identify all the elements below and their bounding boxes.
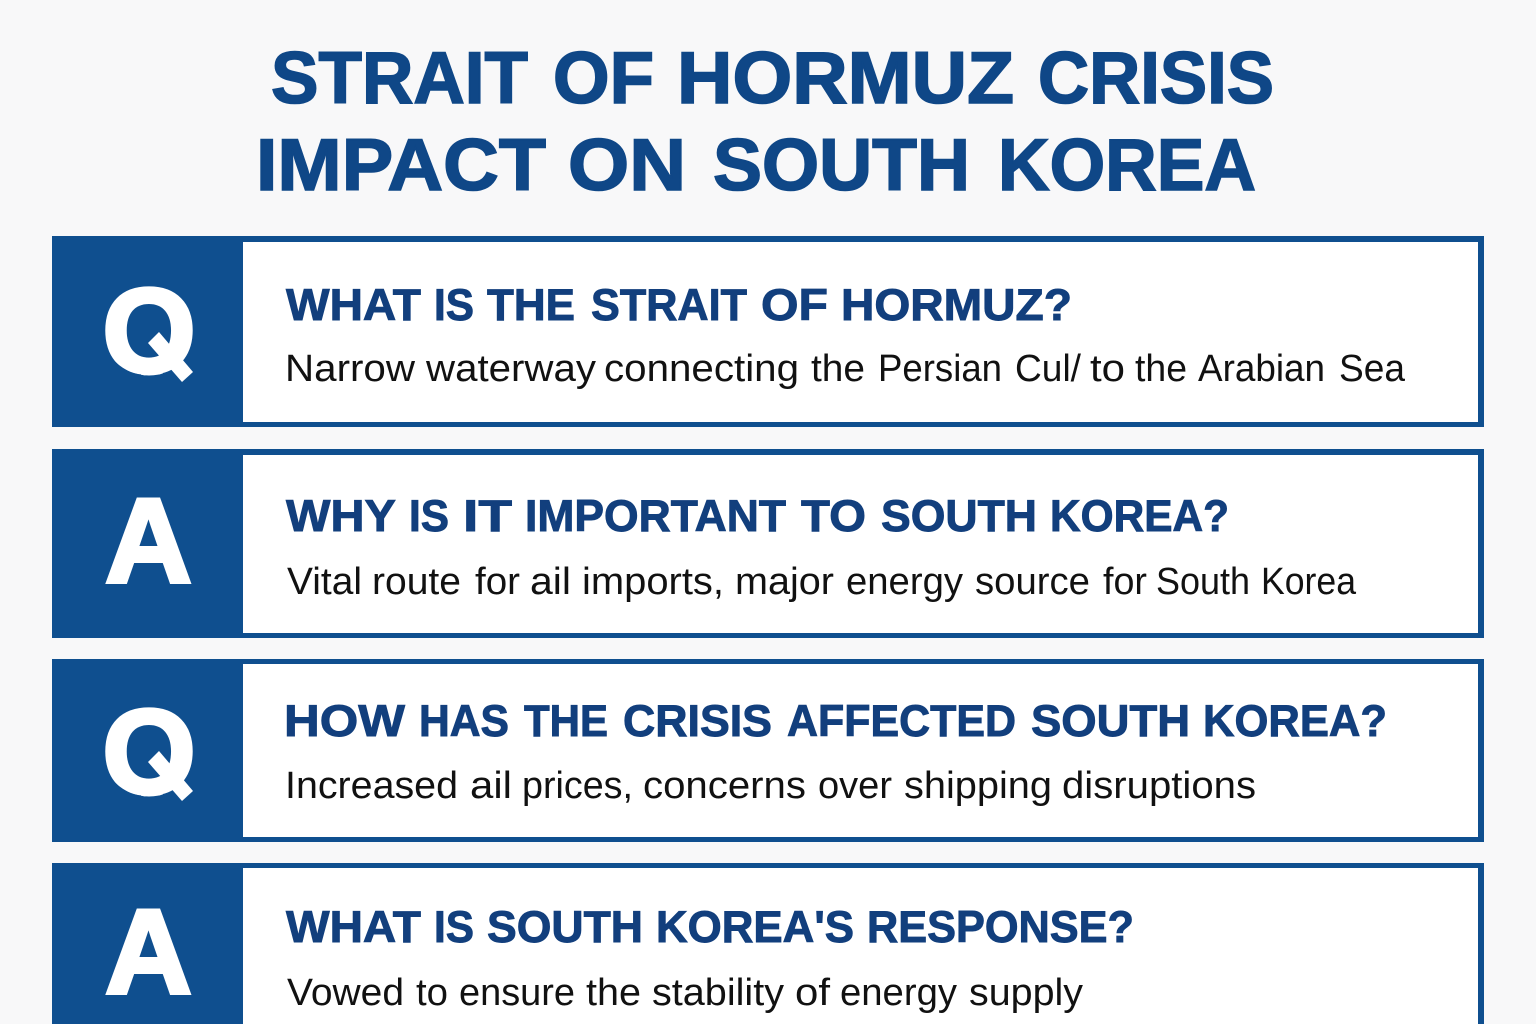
text: energy stability: the (586, 972, 641, 1014)
heading: how affected: AFFECTED (787, 697, 1016, 746)
text: increased prices: over (818, 765, 892, 807)
title: HORMUZ (677, 38, 1014, 119)
text: energy stability: energy (840, 972, 957, 1014)
icon: Q badge (105, 286, 193, 382)
icon: A badge: A (105, 474, 192, 608)
heading: response: KOREA'S (656, 903, 854, 952)
heading: why important: KOREA? (1050, 492, 1229, 541)
title: OF (553, 38, 654, 119)
text: energy stability: of (795, 972, 830, 1014)
panel: answer 1 (52, 449, 1484, 638)
text: energy stability: to (416, 972, 448, 1014)
heading: why important: WHY (286, 492, 395, 541)
text: waterway description: the (811, 348, 865, 390)
heading: why important: IT (463, 492, 512, 541)
text: waterway description: Cul/ (1015, 348, 1081, 390)
heading: how affected: HOW (284, 697, 405, 746)
title: KOREA (998, 125, 1256, 206)
text: waterway description: the (1135, 348, 1187, 390)
icon: Q badge: Q (102, 685, 196, 819)
text: vital route: Vital (287, 561, 362, 603)
text: energy stability: stability (652, 972, 784, 1014)
heading: why important: SOUTH (881, 492, 1037, 541)
heading: response: IS (434, 903, 474, 952)
text: vital route: for (1103, 561, 1147, 603)
panel: question 1 (52, 236, 1484, 427)
heading: what is the strait: OF (761, 281, 828, 330)
text: vital route: energy (846, 561, 963, 603)
text: waterway description: connecting (604, 348, 799, 390)
heading: what is the strait: STRAIT (591, 281, 747, 330)
icon: Q badge (105, 707, 193, 801)
heading: response: RESPONSE? (867, 903, 1134, 952)
heading: how affected: SOUTH (1031, 697, 1190, 746)
text: increased prices: Increased (285, 765, 458, 807)
title: STRAIT (271, 38, 528, 119)
icon: A badge: A (105, 885, 192, 1019)
text: vital route: imports, (582, 561, 724, 603)
panel: answer 2 (52, 863, 1484, 1024)
title: CRISIS (1038, 38, 1274, 119)
text: vital route: ail (530, 561, 571, 603)
text: vital route: South (1156, 561, 1250, 603)
text: energy stability: ensure (459, 972, 575, 1014)
text: energy stability: supply (969, 972, 1083, 1014)
heading: why important: IS (409, 492, 449, 541)
heading: why important: IMPORTANT (525, 492, 786, 541)
panel: question 2 (52, 659, 1484, 842)
icon: Q badge: Q (102, 264, 196, 398)
heading: response: SOUTH (487, 903, 643, 952)
heading: how affected: THE (524, 697, 608, 746)
text: waterway description: Sea (1339, 348, 1406, 390)
heading: how affected: HAS (419, 697, 509, 746)
text: waterway description: Narrow (285, 348, 416, 390)
text: increased prices: concerns (643, 765, 806, 807)
text: waterway description: Arabian (1198, 348, 1325, 390)
text: increased prices: prices, (522, 765, 633, 807)
text: vital route: for (475, 561, 520, 603)
text: waterway description: waterway (425, 348, 596, 390)
heading: what is the strait: WHAT (286, 281, 421, 330)
title: ON (568, 125, 686, 206)
heading: why important: TO (801, 492, 866, 541)
text: vital route: major (735, 561, 834, 603)
text: increased prices: ail (470, 765, 512, 807)
title: SOUTH (713, 125, 970, 206)
text: increased prices: shipping (904, 765, 1052, 807)
title (256, 38, 1274, 206)
heading: what is the strait: IS (434, 281, 474, 330)
heading: what is the strait: THE (487, 281, 575, 330)
title: IMPACT (256, 125, 546, 206)
text: energy stability: Vowed (287, 972, 404, 1014)
text: vital route: Korea (1261, 561, 1357, 603)
text: vital route: route (372, 561, 461, 603)
text: waterway description: Persian (878, 348, 1002, 390)
text: increased prices: disruptions (1062, 765, 1256, 807)
text: vital route: source (975, 561, 1090, 603)
heading: how affected: CRISIS (623, 697, 772, 746)
heading: response: WHAT (286, 903, 421, 952)
heading: how affected: KOREA? (1203, 697, 1387, 746)
heading: what is the strait: HORMUZ? (841, 281, 1072, 330)
text: waterway description: to (1090, 348, 1125, 390)
